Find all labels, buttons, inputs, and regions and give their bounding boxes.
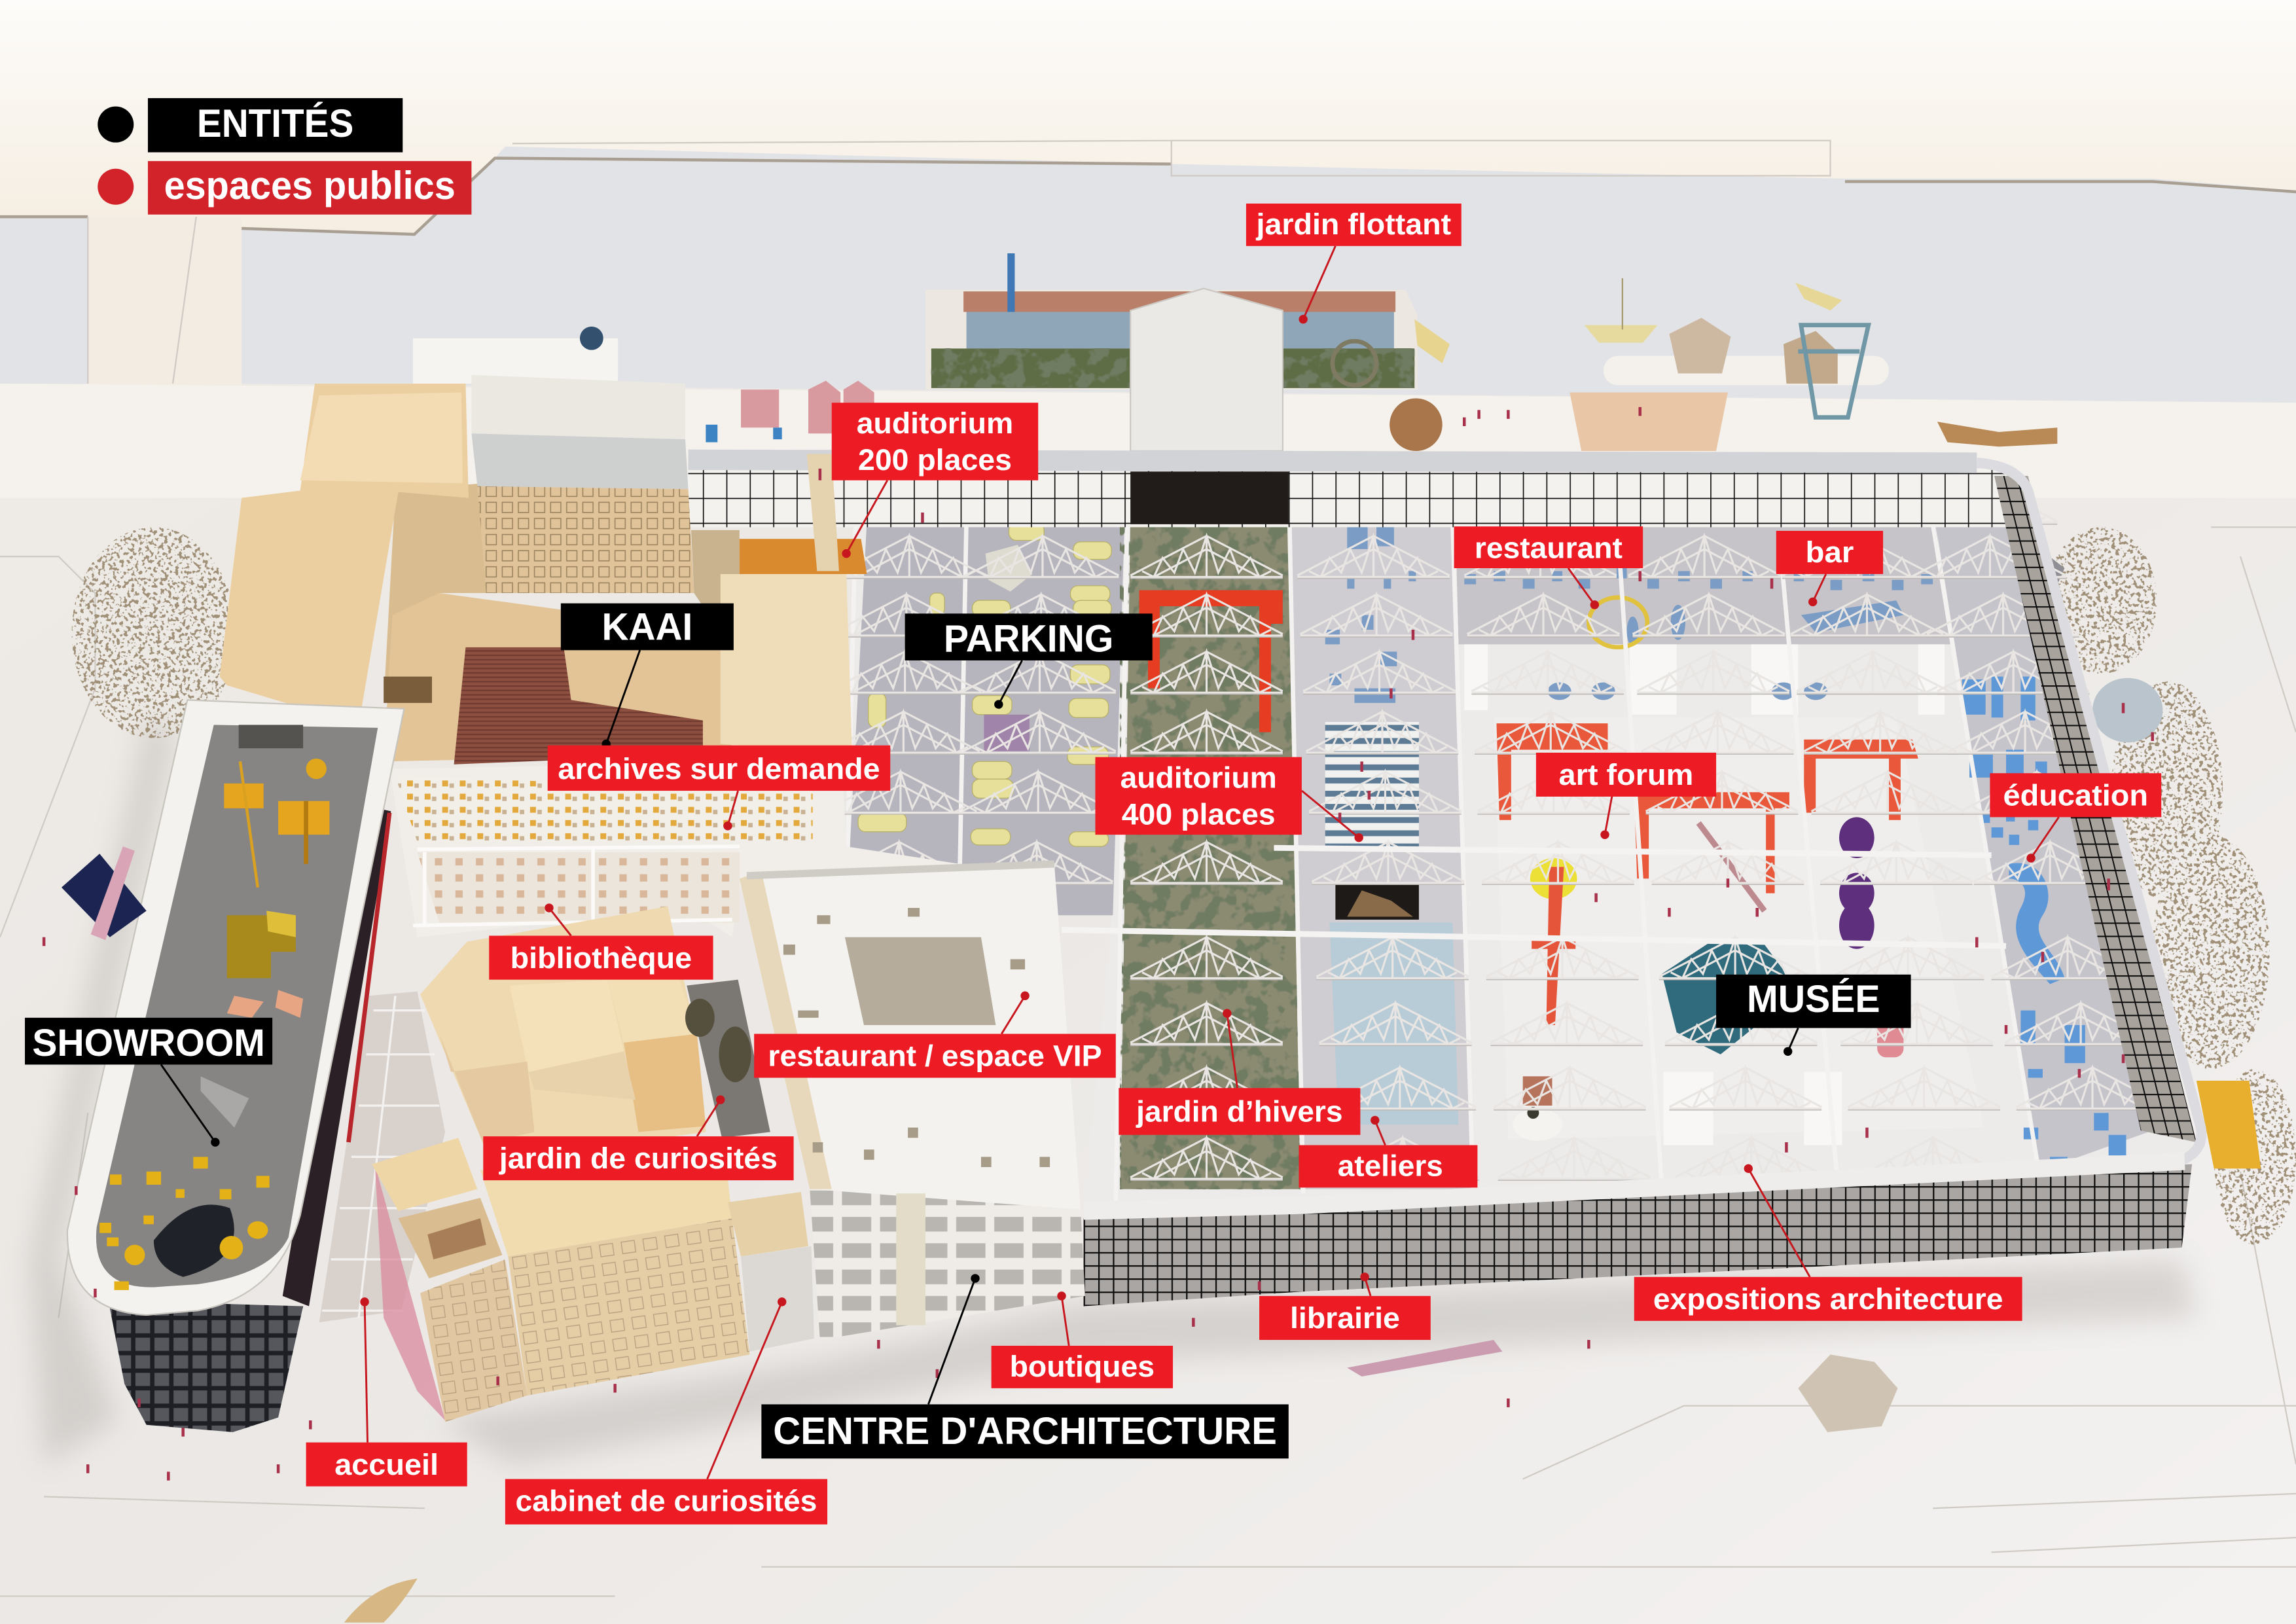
parking floor <box>846 521 1124 915</box>
label: librairie: librairie <box>1290 1301 1400 1335</box>
building C facade <box>508 1218 749 1396</box>
bay columns <box>846 476 2038 1200</box>
label: ateliers <box>1299 1116 1477 1187</box>
label: accueil: accueil <box>334 1447 439 1481</box>
label: bar: bar <box>1806 535 1854 569</box>
label: restaurant / espace VIP <box>754 992 1116 1078</box>
showroom glazing <box>109 1301 303 1432</box>
legend chip: ENTITES: ENTITÉS <box>197 101 353 145</box>
boats and objects on the water <box>1585 278 1889 418</box>
label: auditorium 200 places: auditorium <box>857 406 1013 440</box>
central dark entrance <box>1130 471 1289 524</box>
label: education <box>1990 773 2161 863</box>
building D facade <box>741 1246 814 1352</box>
CIVA left wall <box>740 871 832 1189</box>
auditorium 400 seating <box>1325 722 1419 848</box>
label: restaurant / espace VIP: restaurant / espace VIP <box>768 1039 1102 1073</box>
blue furniture <box>1325 520 2065 703</box>
kaai left block <box>220 384 469 725</box>
white tent <box>1130 289 1283 451</box>
left face <box>439 1034 535 1144</box>
label: art forum <box>1536 753 1716 839</box>
showroom grey roof <box>96 725 378 1288</box>
purple spheres <box>1839 817 1874 949</box>
center face <box>529 1051 636 1100</box>
trusses <box>823 482 2168 1180</box>
water basin <box>0 147 2296 403</box>
quay strip in front of water <box>0 384 2296 498</box>
kaai dark walls <box>384 677 432 703</box>
label: jardin de curiosites <box>483 1095 794 1180</box>
pier with blue sphere <box>413 327 618 384</box>
kaai right block <box>721 574 852 755</box>
legend dot: espaces publics <box>98 169 134 205</box>
CIVA facade lettering column <box>896 1193 925 1326</box>
kaai left roof shade <box>300 393 463 483</box>
screen picture <box>1335 883 1419 920</box>
kaai side fill <box>691 530 740 632</box>
legend chip: espaces publics: espaces publics <box>164 163 456 208</box>
label: archives sur demande <box>548 746 890 830</box>
kaai tower roof <box>471 375 685 439</box>
label: auditorium 400 places: auditorium <box>1120 761 1277 795</box>
CIVA courtyard <box>845 937 996 1025</box>
chimney <box>807 454 839 571</box>
yellow ring <box>1588 598 1647 647</box>
pink screw and navy mat <box>62 846 147 940</box>
CIVA top rail <box>747 864 1054 876</box>
art forum red structures <box>1496 723 1918 893</box>
top fence <box>689 469 2026 527</box>
top rim <box>689 460 1977 463</box>
right rim <box>1977 463 2201 1163</box>
purple block and white polyhedra <box>984 545 1032 751</box>
label: archives sur demande: archives sur demande <box>558 751 880 785</box>
label: MUSEE <box>1716 975 1911 1056</box>
bright blue education furniture <box>1962 677 2126 1166</box>
label: KAAI <box>561 604 734 748</box>
label: bibliotheque: bibliothèque <box>511 941 692 975</box>
pink wall <box>375 1164 445 1420</box>
showroom red line <box>348 813 389 1142</box>
jardin de curiosites ground <box>687 980 770 1138</box>
kaai back fill <box>384 483 490 703</box>
bottom rim <box>1084 1161 2185 1211</box>
ground shadow under model <box>29 717 2197 1464</box>
boulder <box>1798 1354 1897 1432</box>
legend <box>98 98 471 215</box>
label: auditorium 400 places: 400 places <box>1122 797 1276 831</box>
building B roof <box>372 1138 477 1211</box>
CIVA roof <box>740 864 1081 1210</box>
library terraces <box>389 761 1054 937</box>
restaurant band <box>1456 523 1950 644</box>
label: expositions architecture <box>1634 1164 2022 1321</box>
quay objects: ball, plaza, tan sculpture <box>1390 393 2057 451</box>
pink figure <box>1877 996 1903 1057</box>
library rails <box>413 846 740 926</box>
label: art forum: art forum <box>1559 757 1693 791</box>
kaai tower facade <box>477 486 694 593</box>
kaai courtyard <box>384 593 732 761</box>
left cream road <box>88 217 242 387</box>
white wall blocks <box>1464 644 1945 1145</box>
label: jardin flottant: jardin flottant <box>1256 207 1451 241</box>
label: jardin d'hivers <box>1119 1009 1360 1135</box>
trees <box>72 527 2296 1245</box>
winter garden <box>1120 515 1300 1189</box>
label: auditorium 400 places <box>1095 757 1363 842</box>
long cross beams <box>1062 848 2006 946</box>
main hall floor <box>842 465 2197 1212</box>
miniature people <box>44 407 2153 1481</box>
building D back <box>728 1192 808 1256</box>
round plinth <box>1513 1076 1562 1141</box>
kaai tower glass <box>471 433 689 489</box>
label: accueil <box>306 1297 467 1487</box>
parked cars <box>858 523 1111 846</box>
showroom objects <box>99 725 329 1290</box>
bibliotheque block roof <box>420 907 706 1154</box>
label: PARKING <box>905 613 1153 709</box>
label: education: éducation <box>2003 778 2148 812</box>
label: auditorium 200 places <box>832 403 1038 558</box>
showroom rim <box>67 700 404 1315</box>
label: PARKING: PARKING <box>944 618 1113 660</box>
yellow disc and red tower <box>1530 858 1577 1025</box>
education strip <box>1936 524 2153 1172</box>
kaai tower windows <box>477 486 694 593</box>
label: cabinet de curiosites <box>505 1297 827 1525</box>
right box roof <box>607 975 697 1043</box>
label: SHOWROOM: SHOWROOM <box>32 1022 265 1064</box>
label: bibliotheque <box>489 903 713 980</box>
library shelves top <box>395 776 813 842</box>
grey workshop floor <box>1291 518 1473 1189</box>
pale blue foyer <box>1329 922 1458 1125</box>
building C windows <box>508 1218 749 1396</box>
label: boutiques: boutiques <box>1010 1349 1155 1383</box>
label: expositions architecture: expositions architecture <box>1653 1282 2003 1316</box>
floating garden <box>925 253 1450 389</box>
label: ateliers: ateliers <box>1338 1148 1443 1182</box>
lower pink screw <box>1347 1340 1502 1377</box>
museum floor <box>1452 520 2036 1193</box>
right side objects <box>2092 678 2261 1168</box>
upper box roof <box>510 980 624 1072</box>
label: CENTRE D'ARCHITECTURE <box>761 1274 1289 1458</box>
museum lower gallery <box>1494 717 1984 1140</box>
pink stair <box>1698 823 1765 911</box>
background: top cream quay <box>0 0 2296 234</box>
right fence <box>1994 476 2197 1142</box>
legend chip: ENTITES <box>148 98 403 153</box>
label: cabinet de curiosites: cabinet de curiosités <box>516 1484 817 1518</box>
bottom fence <box>1084 1164 2192 1307</box>
legend dot: entites <box>98 107 134 143</box>
building B facade <box>420 1259 527 1422</box>
atrium glass ribs <box>322 996 439 1318</box>
label: MUSEE: MUSÉE <box>1747 978 1880 1020</box>
label: CENTRE D'ARCHITECTURE: CENTRE D'ARCHITECTURE <box>773 1410 1277 1453</box>
brick roofs <box>454 647 703 765</box>
right box face <box>624 1034 706 1132</box>
showroom facade strip <box>283 805 391 1307</box>
label: librairie <box>1259 1272 1431 1340</box>
label: jardin flottant <box>1246 204 1462 323</box>
building B windows <box>420 1259 527 1422</box>
roof furniture <box>783 908 1050 1167</box>
CIVA facade <box>810 1189 1085 1340</box>
building B top block <box>399 1198 502 1278</box>
label: jardin de curiosites: jardin de curiosités <box>499 1141 778 1175</box>
label: bar <box>1776 531 1883 606</box>
building B window slot <box>427 1218 486 1259</box>
quay shadow edge <box>0 158 2296 234</box>
tan bottom shape <box>344 1579 418 1623</box>
label: SHOWROOM <box>25 1018 272 1147</box>
building C roof <box>480 1170 732 1256</box>
red frame in garden <box>1139 590 1283 732</box>
library lower shelf band <box>418 852 740 922</box>
teal carpet <box>1662 940 1794 1055</box>
tree blobs <box>685 999 751 1082</box>
glass atrium <box>319 992 445 1322</box>
pink sheds <box>741 381 874 433</box>
label: restaurant <box>1454 526 1643 609</box>
label: restaurant: restaurant <box>1475 530 1623 564</box>
label: KAAI: KAAI <box>602 606 692 649</box>
label: auditorium 200 places: 200 places <box>858 442 1012 477</box>
blue small cubes <box>706 425 782 442</box>
orange auditorium block <box>740 539 867 574</box>
label: boutiques <box>992 1291 1173 1388</box>
label: jardin d'hivers: jardin d’hivers <box>1136 1094 1343 1128</box>
